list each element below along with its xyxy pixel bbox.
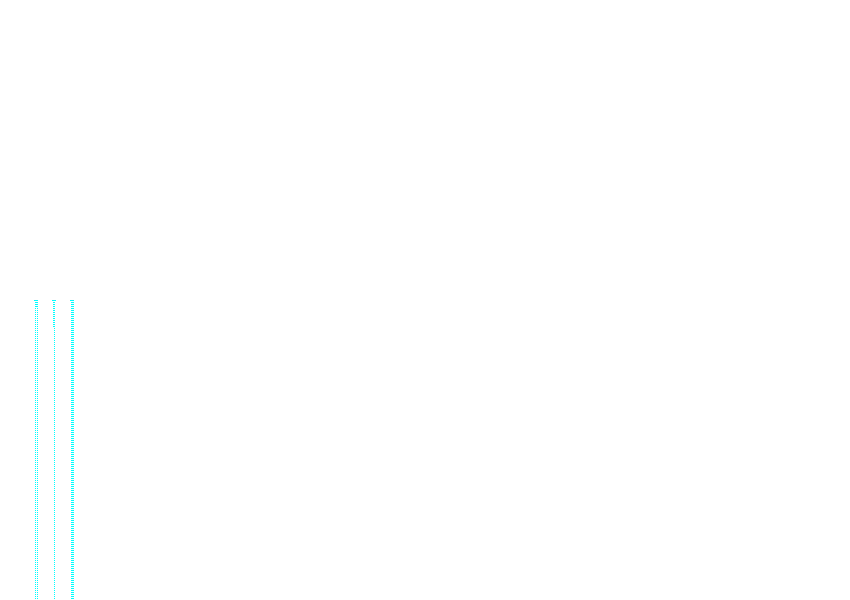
dotted line 2 bbox=[52, 300, 56, 599]
dotted line 3 bbox=[70, 300, 74, 599]
dotted line 1 bbox=[34, 300, 38, 599]
